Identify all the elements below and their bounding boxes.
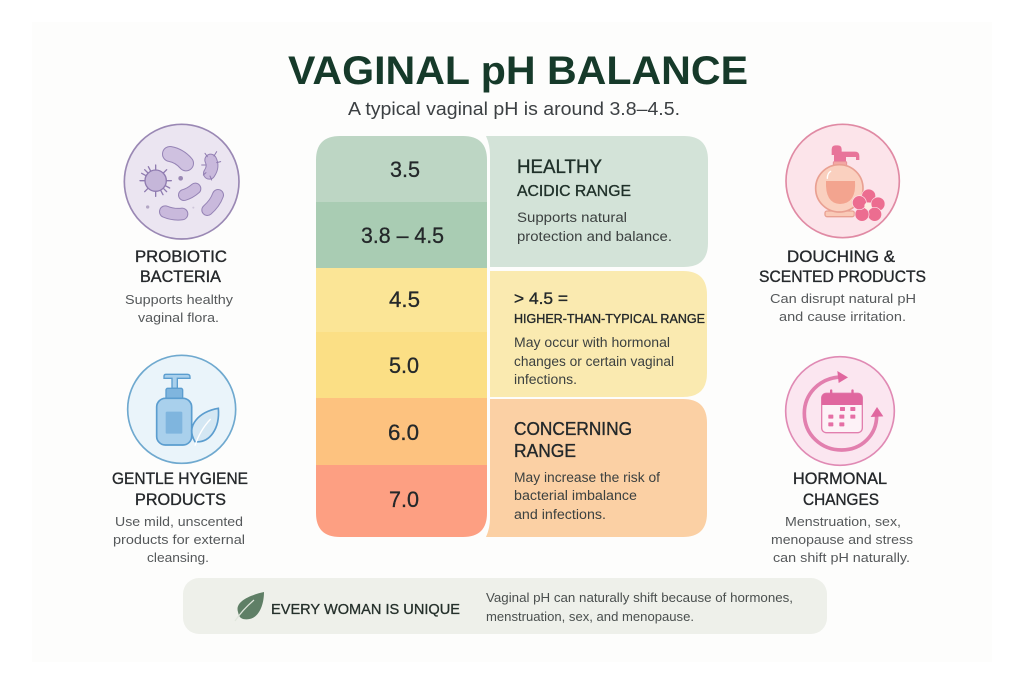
heading: higher-than-typical range: HIGHER-THAN-TYPICAL RANGE <box>514 312 705 326</box>
text: probiotic description: vaginal flora. <box>138 310 219 325</box>
heading: concerning range: RANGE <box>514 440 576 461</box>
text: hormonal description: menopause and stress <box>771 532 914 547</box>
title: VAGINAL pH BALANCE <box>288 49 748 93</box>
text: healthy description <box>517 210 672 244</box>
text: higher range description: changes or certain vaginal <box>514 354 674 369</box>
text: hygiene description: products for external <box>113 532 245 547</box>
panel: healthy acidic range <box>486 136 708 267</box>
text: concerning description: and infections. <box>514 507 606 522</box>
callout text: menstruation, sex, and menopause. <box>486 610 694 624</box>
text: concerning description: May increase the risk of <box>514 470 660 485</box>
panel: probiotic bacteria <box>124 124 239 325</box>
heading: probiotic bacteria <box>135 248 227 286</box>
scale values: 5.0 <box>389 353 419 378</box>
heading: concerning range <box>514 418 632 461</box>
text: probiotic description: Supports healthy <box>125 292 234 307</box>
text: hygiene description: Use mild, unscented <box>115 514 243 529</box>
heading: gentle hygiene products: PRODUCTS <box>135 491 226 509</box>
heading: douching and scented products <box>759 248 926 286</box>
text: douching description <box>770 291 916 324</box>
heading: gentle hygiene products <box>112 470 248 509</box>
chart: pH scale <box>316 136 487 537</box>
text: douching description: Can disrupt natural pH <box>770 291 916 306</box>
heading: douching and scented products: SCENTED PRODUCTS <box>759 268 926 286</box>
callout heading: EVERY WOMAN IS UNIQUE <box>271 602 460 618</box>
heading: gentle hygiene products: GENTLE HYGIENE <box>112 470 248 488</box>
text: hygiene description <box>113 514 245 565</box>
text: higher range description: May occur with hormonal <box>514 335 670 350</box>
icon: perfume bottle and flower <box>786 124 899 238</box>
icon: pump bottle and leaf <box>128 355 236 463</box>
text: higher range description: infections. <box>514 372 577 387</box>
panel: higher-than-typical range <box>490 271 707 397</box>
text: hygiene description: cleansing. <box>147 550 209 565</box>
icon: calendar with cycle arrows <box>786 357 894 465</box>
text: concerning description <box>514 470 660 522</box>
scale values: 3.5 <box>390 157 420 182</box>
text: hormonal description <box>771 514 914 565</box>
text: healthy description: protection and balance. <box>517 229 672 244</box>
heading: concerning range: CONCERNING <box>514 418 632 439</box>
text: higher range description <box>514 335 674 387</box>
heading: probiotic bacteria: BACTERIA <box>140 268 221 286</box>
text: healthy description: Supports natural <box>517 210 627 225</box>
icon: bacteria <box>124 124 239 239</box>
scale values <box>361 157 444 512</box>
heading: healthy acidic range: ACIDIC RANGE <box>517 183 631 200</box>
heading: higher-than-typical range <box>514 289 705 326</box>
heading: douching and scented products: DOUCHING & <box>787 248 895 266</box>
panel: gentle hygiene products <box>112 355 248 565</box>
icon: leaf <box>235 592 264 621</box>
text: hormonal description: Menstruation, sex, <box>785 514 901 529</box>
callout text <box>486 591 793 624</box>
panel: douching and scented products <box>759 124 926 324</box>
text: probiotic description <box>125 292 234 325</box>
scale values: 4.5 <box>389 287 420 312</box>
text: douching description: and cause irritation. <box>779 309 906 324</box>
heading: healthy acidic range <box>517 156 631 200</box>
callout text: Vaginal pH can naturally shift because of hormones, <box>486 591 793 605</box>
callout: every woman is unique <box>183 578 827 634</box>
heading: hormonal changes: CHANGES <box>803 491 879 509</box>
heading: hormonal changes: HORMONAL <box>793 470 887 488</box>
text: concerning description: bacterial imbalance <box>514 488 637 503</box>
scale values: 7.0 <box>389 487 419 512</box>
heading: higher-than-typical range: > 4.5 = <box>514 289 568 308</box>
scale colour bands <box>316 136 487 537</box>
text: hormonal description: can shift pH naturally. <box>773 550 910 565</box>
panel: hormonal changes <box>771 357 914 565</box>
heading: healthy acidic range: HEALTHY <box>517 156 602 178</box>
panel: concerning range <box>486 399 707 537</box>
scale values: 6.0 <box>388 420 419 445</box>
subtitle: A typical vaginal pH is around 3.8–4.5. <box>348 98 680 119</box>
heading: hormonal changes <box>793 470 887 509</box>
heading: probiotic bacteria: PROBIOTIC <box>135 248 227 266</box>
scale values: 3.8 – 4.5 <box>361 223 444 248</box>
